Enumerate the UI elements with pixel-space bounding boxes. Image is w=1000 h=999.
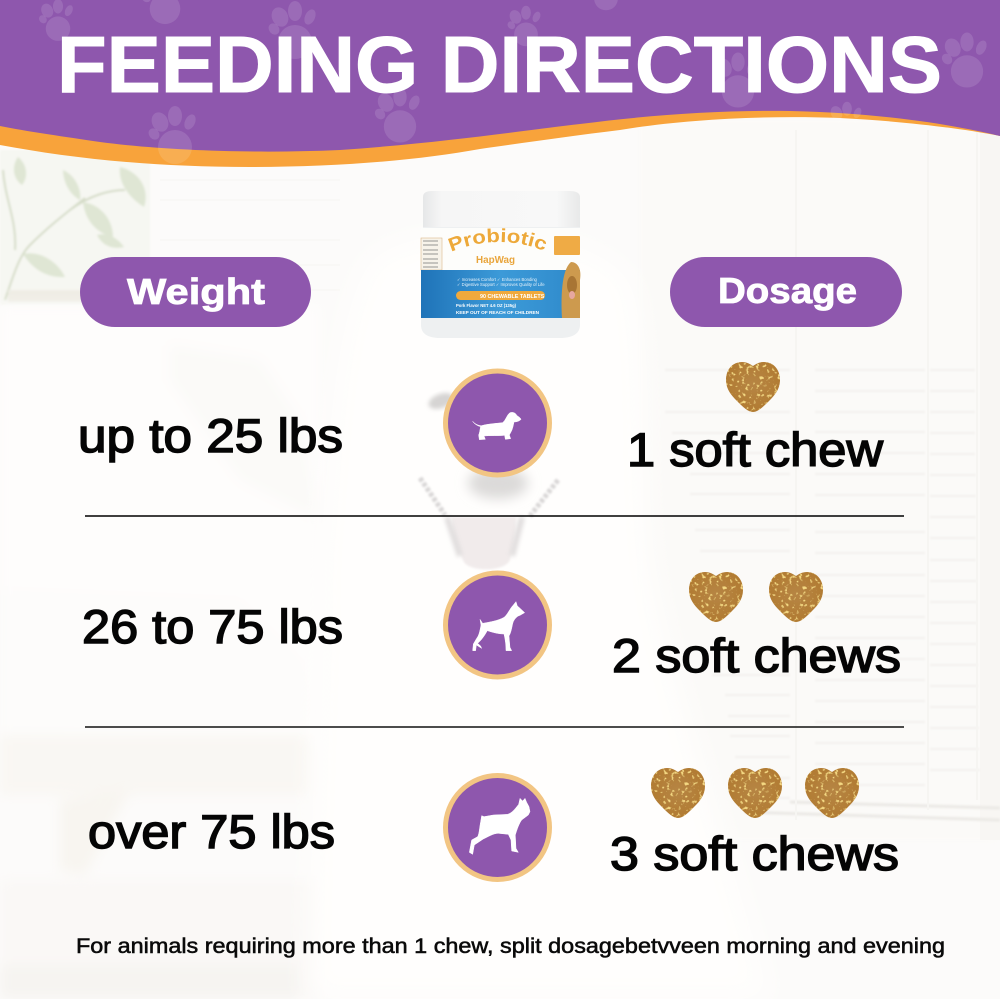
dose: two chews: [612, 572, 901, 682]
product jar: Pork Flavor NET 4.6 OZ (135g): [456, 303, 517, 308]
orange badge: [554, 236, 580, 255]
label white area: [421, 228, 580, 270]
dose: two chews: 2 soft chews: [612, 629, 901, 682]
dose: three chews: 3 soft chews: [610, 827, 899, 880]
dose: three chews: [610, 768, 899, 880]
blinds wall: [640, 120, 1000, 840]
window with plant: [0, 150, 150, 305]
jar body: [421, 227, 580, 338]
dog body: [310, 232, 770, 999]
row 2: 26 to 75 lbs: 26 to 75 lbs: [82, 600, 343, 653]
icon: small dog: [446, 371, 550, 475]
icon: medium dog: [446, 573, 550, 677]
row 1: up to 25 lbs: up to 25 lbs: [78, 409, 343, 462]
header banner: [0, 0, 1000, 167]
row 3: over 75 lbs: over 75 lbs: [88, 805, 335, 858]
weight heading pill: Weight: [127, 271, 265, 312]
dog on label: [562, 262, 580, 318]
title: FEEDING DIRECTIONS: [57, 20, 942, 109]
orange count bar: [456, 291, 545, 300]
weight heading pill: [80, 257, 311, 327]
divider: [85, 515, 904, 517]
benefits text: ✓ Increases Comfort ✓ Enhances Bonding: [457, 277, 538, 282]
orange wave: [0, 100, 1000, 167]
jar lid: [423, 191, 580, 227]
product jar: ✓ Digestive Support ✓ Improves Quality of Life: [457, 282, 545, 287]
label blue band: [421, 270, 580, 318]
sofa: [0, 306, 320, 999]
dog face: eye, nose, mouth and tongue: [420, 390, 558, 569]
brand text: Probiotic: [448, 228, 546, 252]
product jar: 90 CHEWABLE TABLETS: [480, 294, 545, 300]
product jar: [420, 191, 580, 338]
paw prints: [37, 0, 989, 164]
faint blinds behind top left: [160, 180, 340, 290]
dose: one chew: [627, 362, 884, 476]
dosage heading pill: Dosage: [718, 270, 857, 311]
product jar: KEEP OUT OF REACH OF CHILDREN: [456, 310, 540, 315]
footer note: For animals requiring more than 1 chew, split dosagebetvveen morning and evening: [76, 935, 945, 958]
product jar: HapWag: [476, 254, 515, 266]
divider: [85, 726, 904, 728]
purple wave: [0, 0, 1000, 152]
icon: large dog: [446, 776, 550, 880]
dose: one chew: 1 soft chew: [627, 423, 884, 476]
label side panel: [421, 238, 442, 270]
dosage heading pill: [670, 257, 902, 327]
